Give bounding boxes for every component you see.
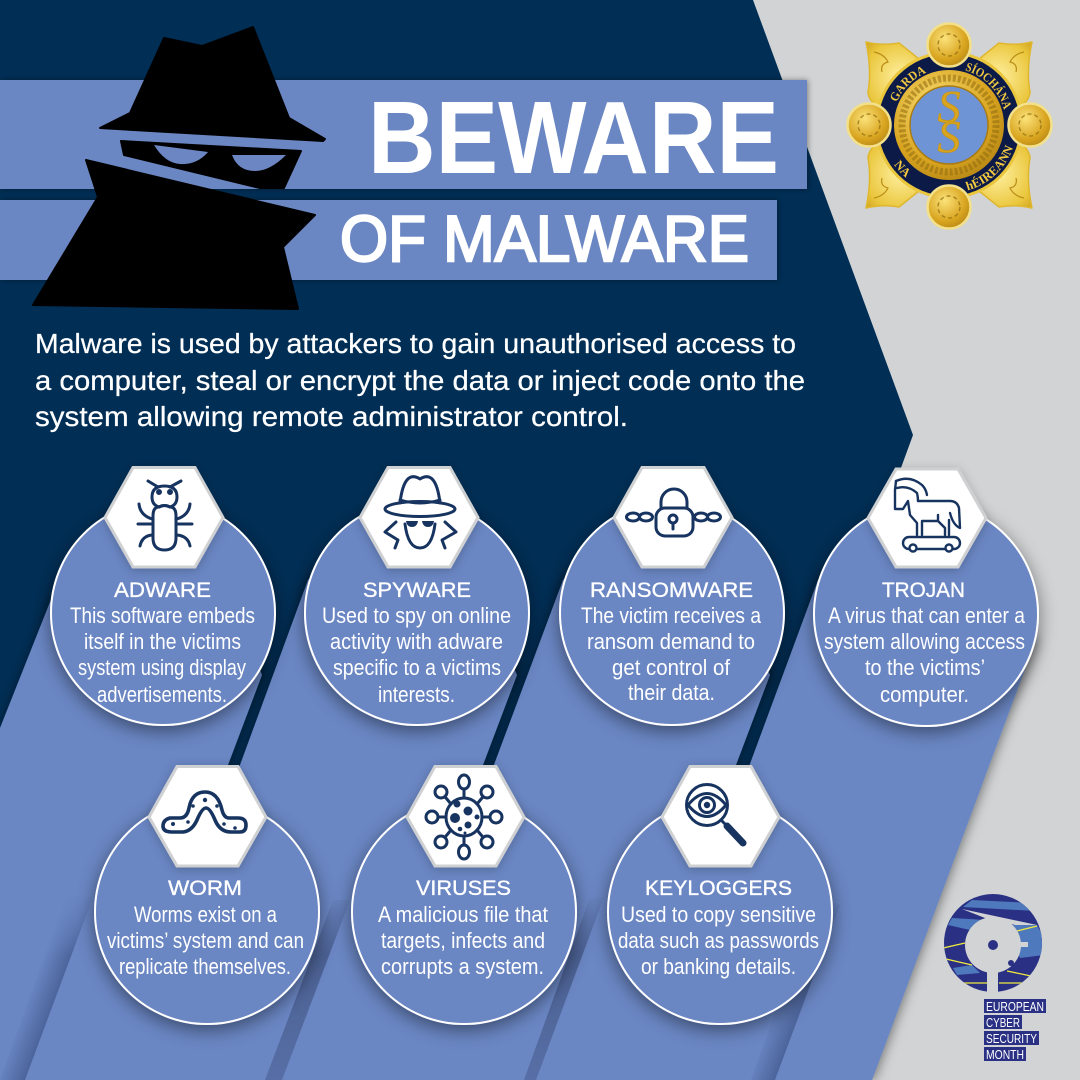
body text: interests.: [378, 682, 455, 707]
badge lettering: GARDA: [890, 66, 926, 101]
body text: [70, 603, 255, 707]
body text: their data.: [628, 680, 715, 705]
badge lettering: hÉIREANN: [965, 144, 1013, 190]
icon: worm: [163, 792, 246, 832]
logo: european cyber security month: EUROPEAN: [986, 999, 1044, 1014]
logo: european cyber security month: [943, 894, 1046, 1062]
icon: magnifier with eye: [686, 784, 743, 843]
body text: to the victims’: [865, 655, 985, 680]
body text: system allowing access: [824, 629, 1025, 654]
heading: KEYLOGGERS: [645, 877, 792, 900]
body text: victims’ system and can: [107, 928, 304, 953]
panel: viruses: [352, 766, 576, 1024]
icon: masked spy figure: [33, 27, 325, 309]
intro paragraph: [35, 328, 805, 432]
body text: Worms exist on a: [134, 902, 278, 927]
banner: of malware: [0, 200, 777, 280]
logo: european cyber security month: SECURITY: [986, 1031, 1037, 1046]
badge monogram: [938, 81, 960, 162]
icon: trojan horse: [895, 479, 960, 552]
body text: itself in the victims: [84, 629, 241, 654]
badge lettering: NA: [894, 160, 909, 178]
body text: Used to copy sensitive: [621, 902, 816, 927]
icon: virus: [426, 775, 502, 859]
title: beware: BEWARE: [368, 80, 779, 195]
body text: data such as passwords: [618, 928, 819, 953]
badge lettering: SÍOCHÁNA: [966, 63, 1011, 110]
heading: WORM: [168, 877, 242, 900]
body text: The victim receives a: [581, 603, 762, 628]
body text: [824, 603, 1026, 707]
panel: adware: [51, 468, 275, 725]
body text: This software embeds: [70, 603, 255, 628]
body text: [378, 902, 548, 979]
badge medallions: [848, 24, 1052, 228]
intro paragraph: Malware is used by attackers to gain unauthorised access to: [35, 328, 796, 359]
badge lettering: [890, 63, 1013, 190]
body text: A malicious file that: [378, 902, 548, 927]
stripe shadow edges: [2, 904, 838, 1080]
icon: bug: [138, 481, 192, 550]
body text: activity with adware: [330, 629, 503, 654]
body text: [107, 902, 304, 979]
badge monogram: S: [938, 111, 960, 162]
body text: A virus that can enter a: [828, 603, 1026, 628]
background blue stripes: [0, 530, 1036, 1080]
panel: spyware: [305, 468, 529, 725]
body text: system using display: [78, 655, 246, 680]
body text: or banking details.: [641, 954, 796, 979]
badge monogram: S: [938, 81, 960, 132]
icon: padlock with chains: [626, 489, 720, 536]
body text: Used to spy on online: [322, 603, 511, 628]
body text: advertisements.: [97, 682, 227, 707]
body text: specific to a victims: [333, 655, 501, 680]
panel: keyloggers: [608, 766, 832, 1024]
body text: corrupts a system.: [381, 954, 544, 979]
panel: worm: [95, 766, 319, 1024]
heading: ADWARE: [114, 579, 211, 602]
panel: ransomware: [560, 468, 784, 725]
intro paragraph: system allowing remote administrator control.: [35, 401, 628, 432]
body text: targets, infects and: [381, 928, 545, 953]
body text: get control of: [612, 655, 731, 680]
body text: ransom demand to: [587, 629, 755, 654]
title: of malware: OF MALWARE: [340, 202, 749, 275]
intro paragraph: a computer, steal or encrypt the data or inject code onto the: [35, 365, 805, 396]
logo: garda badge: [846, 22, 1053, 230]
body text: [618, 902, 819, 979]
heading: SPYWARE: [363, 579, 471, 602]
logo: european cyber security month: MONTH: [986, 1047, 1024, 1062]
body text: computer.: [880, 682, 969, 707]
logo: european cyber security month: CYBER: [986, 1015, 1020, 1030]
body text: replicate themselves.: [119, 954, 291, 979]
body text: [581, 603, 762, 705]
body text: [322, 603, 511, 707]
banner: beware: [0, 80, 807, 189]
heading: RANSOMWARE: [590, 579, 753, 602]
heading: TROJAN: [882, 579, 965, 602]
panel: trojan: [814, 469, 1038, 726]
icon: spy: [385, 477, 456, 548]
heading: VIRUSES: [416, 877, 511, 900]
